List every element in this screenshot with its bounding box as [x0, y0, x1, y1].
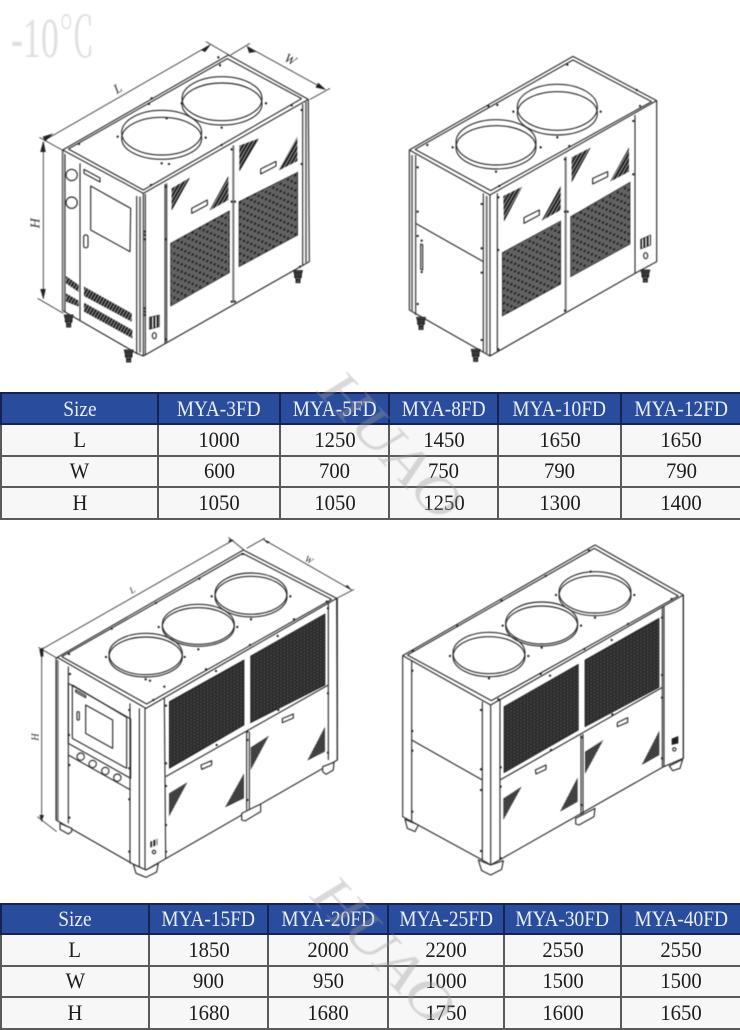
drawing: small chiller rear view: [409, 56, 657, 361]
fans: [456, 84, 597, 169]
power grille: [672, 736, 678, 751]
table: MYA-3FD to MYA-12FD sizes: 1250: [314, 427, 355, 452]
table: MYA-3FD to MYA-12FD sizes: 1450: [423, 427, 464, 452]
table: MYA-3FD to MYA-12FD sizes: 600: [203, 458, 235, 483]
table: MYA-3FD to MYA-12FD sizes: 1650: [660, 427, 702, 452]
drawing: small chiller front-left view with dimensions: [28, 42, 330, 362]
table: MYA-15FD to MYA-40FD sizes: MYA-15FD: [162, 906, 255, 931]
table: MYA-15FD to MYA-40FD sizes: H: [68, 1000, 82, 1025]
control panel: [68, 683, 131, 790]
power grille: [149, 315, 159, 339]
dimension lines: H: [31, 733, 42, 742]
table: MYA-15FD to MYA-40FD sizes: 2000: [307, 937, 349, 962]
table: MYA-15FD to MYA-40FD sizes: 1650: [660, 1000, 702, 1025]
mesh panels: [169, 614, 325, 768]
table: MYA-15FD to MYA-40FD sizes: 2550: [660, 937, 702, 962]
side vents: [172, 137, 297, 213]
table: MYA-15FD to MYA-40FD sizes: 950: [312, 968, 344, 993]
table: MYA-15FD to MYA-40FD sizes: 1850: [188, 937, 229, 962]
table: MYA-3FD to MYA-12FD sizes: MYA-12FD: [634, 396, 728, 420]
table: MYA-15FD to MYA-40FD sizes: L: [69, 937, 81, 962]
table: MYA-3FD to MYA-12FD sizes: L: [73, 427, 86, 452]
table: MYA-15FD to MYA-40FD sizes: 1680: [188, 1000, 229, 1025]
power grille: [641, 235, 651, 259]
power grille: [150, 839, 157, 854]
table: MYA-3FD to MYA-12FD sizes: MYA-3FD: [177, 396, 261, 420]
feet: [405, 759, 683, 875]
table: MYA-15FD to MYA-40FD sizes: 1750: [425, 1000, 467, 1025]
table: MYA-15FD to MYA-40FD sizes: MYA-25FD: [399, 906, 493, 931]
heading: -10 degree watermark: -10℃: [11, 8, 95, 70]
drawing: large chiller front-left view with dimensions: [31, 537, 354, 877]
table: MYA-15FD to MYA-40FD sizes: MYA-30FD: [516, 906, 609, 931]
table: MYA-15FD to MYA-40FD sizes: 2200: [425, 937, 467, 962]
fans: [109, 573, 287, 677]
table: MYA-15FD to MYA-40FD sizes: 1500: [660, 968, 702, 993]
table: MYA-15FD to MYA-40FD sizes: 1500: [542, 968, 583, 993]
mesh panels: [171, 172, 298, 306]
table: MYA-3FD to MYA-12FD sizes: 790: [665, 458, 697, 483]
table: MYA-15FD to MYA-40FD sizes: 2550: [542, 937, 583, 962]
table: MYA-3FD to MYA-12FD sizes: 700: [319, 458, 350, 483]
fans: [122, 77, 262, 159]
dimension lines: H: [28, 217, 43, 229]
control door: [66, 169, 131, 252]
table: MYA-3FD to MYA-12FD sizes: MYA-5FD: [293, 396, 376, 420]
dimension lines: [28, 42, 330, 313]
table: MYA-3FD to MYA-12FD sizes: MYA-10FD: [513, 396, 606, 420]
dimension lines: L: [127, 585, 138, 597]
fans: [453, 572, 631, 677]
table: MYA-3FD to MYA-12FD sizes: 1300: [539, 490, 580, 515]
table: MYA-3FD to MYA-12FD sizes: 790: [544, 458, 575, 483]
vents and slots: [169, 714, 325, 817]
watermarks: brand text over tables: HUAO: [306, 358, 475, 533]
table: MYA-3FD to MYA-12FD sizes: 750: [428, 458, 459, 483]
table: MYA-3FD to MYA-12FD sizes: 1650: [539, 427, 580, 452]
table: MYA-15FD to MYA-40FD sizes: 1000: [425, 968, 467, 993]
casters: [64, 271, 302, 362]
table: MYA-3FD to MYA-12FD sizes: 1400: [660, 490, 702, 515]
mesh panels: [504, 618, 659, 773]
vents and slots: [503, 718, 659, 820]
table: MYA-15FD to MYA-40FD sizes: MYA-40FD: [634, 906, 728, 931]
table: MYA-15FD to MYA-40FD sizes: [0, 903, 740, 1030]
vents: [503, 147, 629, 223]
drawing: large chiller rear view: [403, 545, 683, 875]
table: MYA-3FD to MYA-12FD sizes: Size: [63, 396, 96, 420]
table: MYA-15FD to MYA-40FD sizes: W: [65, 968, 85, 993]
casters: [417, 270, 650, 361]
table: MYA-3FD to MYA-12FD sizes: H: [72, 490, 87, 515]
door vents: [66, 276, 132, 338]
table: MYA-3FD to MYA-12FD sizes: MYA-8FD: [402, 396, 485, 420]
table: MYA-3FD to MYA-12FD sizes: [0, 392, 740, 520]
feet: [60, 762, 334, 877]
table: MYA-3FD to MYA-12FD sizes: 1000: [198, 427, 240, 452]
table: MYA-15FD to MYA-40FD sizes: MYA-20FD: [281, 906, 375, 931]
table: MYA-15FD to MYA-40FD sizes: 1600: [542, 1000, 583, 1025]
mesh panels: [502, 182, 630, 316]
table: MYA-15FD to MYA-40FD sizes: Size: [58, 906, 92, 931]
table: MYA-3FD to MYA-12FD sizes: W: [70, 458, 89, 483]
table: MYA-15FD to MYA-40FD sizes: 900: [193, 968, 224, 993]
dimension lines: W: [282, 50, 300, 69]
table: MYA-3FD to MYA-12FD sizes: 1050: [314, 490, 355, 515]
dimension lines: W: [303, 554, 315, 568]
table: MYA-3FD to MYA-12FD sizes: 1250: [423, 490, 464, 515]
table: MYA-15FD to MYA-40FD sizes: 1680: [307, 1000, 349, 1025]
door handle: [421, 244, 423, 270]
table: MYA-3FD to MYA-12FD sizes: 1050: [198, 490, 240, 515]
dimension lines: [31, 537, 354, 832]
dimension lines: L: [110, 80, 125, 97]
